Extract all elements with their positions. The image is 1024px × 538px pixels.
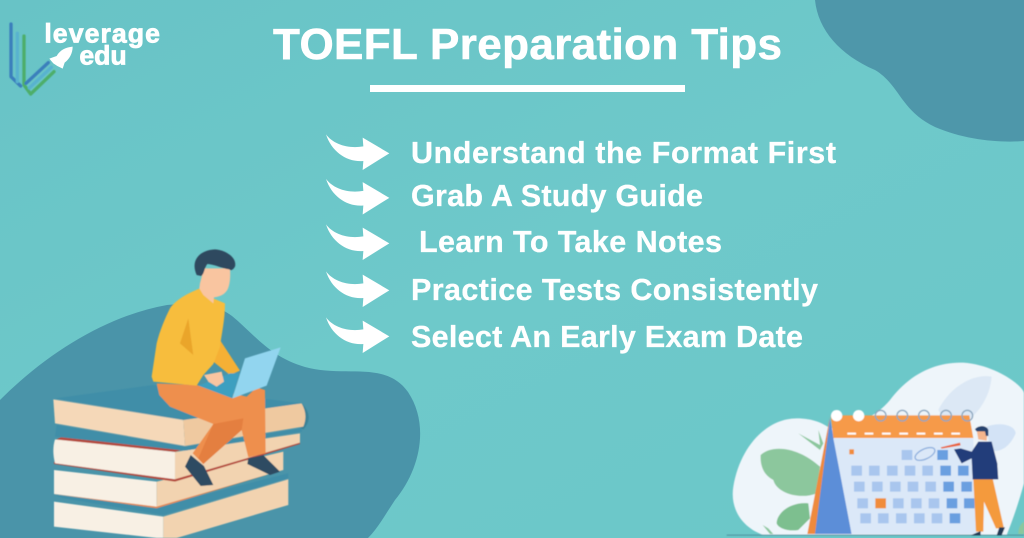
book stack xyxy=(53,385,309,538)
head xyxy=(977,430,988,441)
calendar flap xyxy=(807,417,830,534)
far arm xyxy=(213,340,240,375)
shirt xyxy=(152,288,225,386)
logo: wordmark: leverage xyxy=(44,18,160,48)
ground line xyxy=(727,534,1024,537)
title underline xyxy=(370,85,685,92)
shoe right xyxy=(247,455,280,475)
shoes xyxy=(971,531,981,535)
logo xyxy=(11,18,160,94)
arrow 3 xyxy=(326,224,389,260)
tip 4: Practice Tests Consistently xyxy=(411,273,818,307)
logo: wordmark: edu xyxy=(79,40,127,70)
arrow 5 xyxy=(326,317,389,353)
hair xyxy=(975,426,988,436)
tip 1: Understand the Format First xyxy=(411,136,836,170)
illustration: student on books xyxy=(53,249,309,538)
student figure xyxy=(152,249,281,486)
blob: bottom left xyxy=(0,304,420,538)
pale leaf right xyxy=(987,424,1016,451)
orange marker xyxy=(849,449,854,454)
calendar body xyxy=(833,438,977,534)
laptop base xyxy=(198,373,239,398)
tip 2: Grab A Study Guide xyxy=(411,179,703,213)
blob: top right xyxy=(815,0,1024,142)
arrow 1 xyxy=(326,134,389,170)
circled date xyxy=(913,445,937,463)
tips list xyxy=(326,134,836,354)
calendar header xyxy=(831,415,973,438)
trousers xyxy=(973,478,1004,532)
pale leaves xyxy=(938,376,992,428)
tip 3: Learn To Take Notes xyxy=(419,225,722,259)
logo: pencil mark xyxy=(11,24,54,94)
man with pencil xyxy=(941,426,1005,535)
date grid xyxy=(851,450,975,523)
green plants xyxy=(761,430,1024,534)
tip 5: Select An Early Exam Date xyxy=(411,320,803,354)
hand xyxy=(204,372,224,387)
neck and face xyxy=(199,268,230,303)
logo: rocket xyxy=(49,47,73,69)
shoes xyxy=(185,455,213,486)
laptop screen xyxy=(232,347,281,398)
header dashes xyxy=(847,431,962,437)
illustration: calendar scene xyxy=(727,363,1024,536)
spiral rings xyxy=(832,410,973,421)
sweater xyxy=(954,442,998,479)
hair xyxy=(195,249,235,276)
calendar blue cover xyxy=(815,418,852,534)
pencil xyxy=(941,443,961,449)
title: TOEFL Preparation Tips xyxy=(273,20,782,69)
arrow 2 xyxy=(326,179,389,214)
arrow 4 xyxy=(326,271,389,307)
logo: wordmark xyxy=(44,18,160,70)
trousers xyxy=(157,383,266,464)
white blob backdrop xyxy=(733,363,1024,535)
